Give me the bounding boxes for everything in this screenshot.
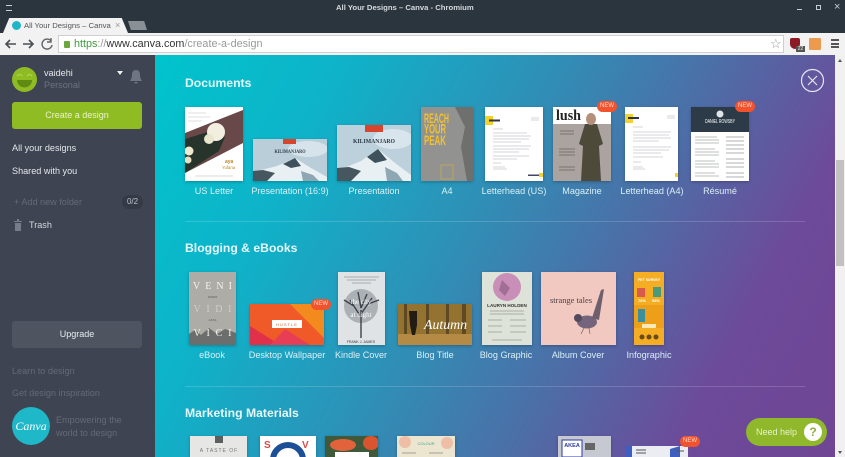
tagline: Empowering the — [56, 415, 122, 425]
thumb: us letter: aya — [225, 159, 234, 165]
badge: brochure new — [680, 436, 700, 447]
thumb: résumé — [691, 107, 749, 181]
thumb: a4: YOUR — [424, 120, 446, 136]
window menu icon — [6, 5, 12, 11]
thumb: menu — [190, 436, 247, 457]
button: upgrade: Upgrade — [60, 329, 94, 339]
thumb: us letter: Yufana — [222, 165, 236, 170]
need help text: Need help — [756, 427, 797, 437]
thumb: magazine: lush — [556, 108, 582, 124]
badge: résumé new: NEW — [738, 103, 752, 109]
thumb: brochure — [626, 446, 688, 457]
dropdown caret — [117, 71, 123, 75]
label: blog title: Blog Title — [416, 350, 454, 360]
link: design inspiration: Get design inspiration — [12, 388, 100, 398]
label: a4: A4 — [441, 186, 453, 196]
thumb: letterhead a4 — [625, 107, 678, 181]
tab title: All Your Designs – Canva — [24, 21, 111, 30]
label: ebook: eBook — [199, 350, 225, 360]
address bar — [58, 35, 784, 53]
thumb: presentation: KILIMANJARO — [353, 139, 395, 145]
extension badge — [796, 46, 805, 52]
thumb: presentation — [337, 125, 411, 181]
inactive tab — [128, 21, 147, 30]
scroll down arrow — [838, 451, 842, 454]
question icon: ? — [809, 425, 817, 439]
label: desktop wallpaper: Desktop Wallpaper — [249, 350, 325, 360]
add new folder: + Add new folder — [14, 197, 82, 207]
thumb: kindle cover: at night — [350, 311, 372, 319]
panel: sidebar — [0, 55, 155, 457]
nav: shared with you: Shared with you — [12, 166, 77, 176]
thumb: ebook: VICI — [194, 328, 232, 339]
scroll up arrow — [838, 59, 842, 62]
scrollbar — [835, 55, 845, 457]
folder count — [122, 195, 143, 209]
label: presentation 16:9: Presentation (16:9) — [251, 186, 329, 196]
thumb: card: COLOUR — [417, 441, 435, 446]
label: magazine: Magazine — [562, 186, 602, 196]
thumb: poster: S — [264, 440, 271, 451]
folder count: 0/2 — [127, 197, 138, 206]
label: blog graphic: Blog Graphic — [480, 350, 532, 360]
thumb: a4: PEAK — [424, 132, 446, 148]
button: upgrade — [12, 321, 142, 348]
button: create a design — [12, 102, 142, 129]
badge: wallpaper new: NEW — [314, 301, 328, 307]
canva logo: Canva — [15, 419, 47, 433]
thumb: newsletter: AKEA — [564, 443, 580, 449]
thumb: blog title: Autumn — [423, 318, 467, 333]
thumb: album cover: strange tales — [550, 296, 592, 305]
navigation arrows — [5, 38, 53, 50]
nav: all your designs: All your designs — [12, 143, 76, 153]
active tab — [3, 18, 128, 33]
thumb: poster: V — [302, 440, 309, 451]
thumb: presentation 16:9: KILIMANJARO — [274, 150, 306, 155]
question icon — [804, 423, 822, 441]
extension: orange — [809, 38, 821, 50]
extension: ublock — [790, 38, 800, 49]
thumb: kindle cover: FRANK J. JAMES — [347, 340, 376, 344]
link: learn to design: Learn to design — [12, 366, 75, 376]
thumb: ebook — [189, 272, 236, 345]
thumb: desktop wallpaper: HUSTLE — [276, 322, 298, 327]
avatar — [12, 67, 37, 92]
badge: résumé new — [735, 101, 755, 112]
scroll thumb — [836, 160, 844, 266]
thumb: ebook: DORIN — [208, 295, 218, 299]
label: infographic: Infographic — [626, 350, 672, 360]
window minimize — [797, 9, 802, 10]
thumb: kindle cover — [338, 272, 385, 345]
tagline — [56, 415, 122, 438]
extension badge: 22 — [798, 46, 803, 52]
thumb: poster — [260, 436, 316, 457]
thumb: blog graphic — [482, 272, 532, 345]
thumb: newsletter — [558, 436, 611, 457]
badge: brochure new: NEW — [683, 438, 697, 444]
thumb: infographic: PET SURVEY — [638, 278, 661, 282]
account type: Personal — [44, 80, 80, 90]
thumb: blog graphic: LAURYN HOLDEN — [487, 303, 527, 308]
heading: marketing materials: Marketing Materials — [185, 406, 299, 420]
window title bar — [0, 0, 845, 33]
label: résumé: Résumé — [703, 186, 737, 196]
need help button — [746, 418, 827, 446]
star icon: ☆ — [770, 36, 782, 51]
thumb: us letter — [185, 107, 243, 181]
label: us letter: US Letter — [195, 186, 233, 196]
URL: https://www.canva.com/create-a-design — [74, 38, 262, 50]
thumb: letterhead us — [485, 107, 543, 181]
panel: design types gradient — [155, 55, 835, 457]
thumb: menu: A TASTE OF — [200, 448, 238, 454]
canva logo — [12, 407, 50, 445]
bell icon — [130, 70, 142, 84]
window close: × — [834, 1, 840, 13]
badge: magazine new: NEW — [600, 103, 614, 109]
badge: magazine new — [597, 101, 617, 112]
thumb: presentation 16:9 — [253, 139, 327, 181]
thumb: blog title — [398, 304, 472, 345]
thumb: album cover — [541, 272, 616, 345]
heading: documents: Documents — [185, 76, 251, 90]
nav: trash: Trash — [29, 220, 52, 230]
thumb: kindle cover: the city — [351, 298, 372, 306]
badge: wallpaper new — [311, 299, 331, 310]
trash icon — [14, 219, 22, 231]
thumb: infographic: 58% — [652, 298, 660, 303]
thumb: infographic — [634, 272, 664, 345]
thumb: résumé: DANIEL ROWSBY — [705, 119, 735, 125]
thumb: ebook: VENI — [193, 281, 232, 292]
tagline: world to design — [56, 428, 117, 438]
user name: vaidehi — [44, 68, 73, 78]
thumb: magazine — [553, 107, 611, 181]
label: album cover: Album Cover — [552, 350, 604, 360]
thumb: ebook: ANTA — [208, 318, 217, 322]
lock icon — [64, 41, 70, 48]
thumb: a4: REACH — [424, 110, 449, 126]
thumb: ebook: VIDI — [194, 304, 232, 315]
tab close: × — [115, 20, 120, 30]
tab favicon — [12, 21, 21, 30]
thumb: desktop wallpaper — [250, 304, 324, 345]
browser toolbar — [0, 33, 845, 55]
window maximize — [816, 5, 821, 10]
browser menu — [831, 39, 839, 48]
thumb: infographic: 76% — [638, 298, 646, 303]
button: create a design: Create a design — [45, 110, 109, 120]
thumb: flyer food — [325, 436, 378, 457]
label: letterhead us: Letterhead (US) — [482, 186, 546, 196]
close button — [800, 68, 824, 92]
label: presentation: Presentation — [348, 186, 400, 196]
label: letterhead a4: Letterhead (A4) — [620, 186, 684, 196]
window title: All Your Designs – Canva - Chromium — [336, 3, 474, 12]
label: kindle cover: Kindle Cover — [335, 350, 387, 360]
thumb: a4 — [421, 107, 473, 181]
heading: blogging and ebooks: Blogging & eBooks — [185, 241, 297, 255]
thumb: card — [397, 436, 455, 457]
